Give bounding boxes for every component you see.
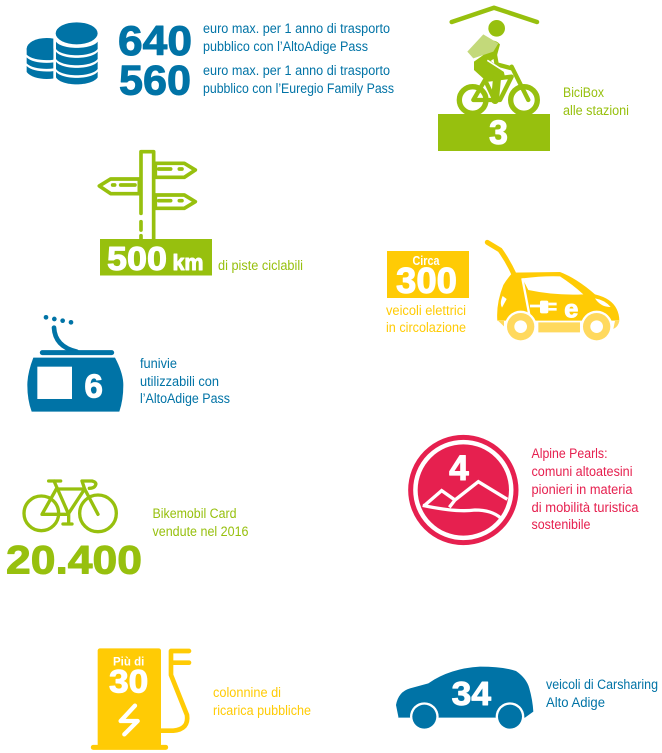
text: charging stations label: colonnine di: [213, 685, 281, 700]
text: cycle paths label: di piste ciclabili: [218, 258, 303, 273]
text: charging stations label: ricarica pubbliche: [213, 703, 311, 718]
icon: charging pump: [93, 648, 189, 747]
text: Alpine Pearls description: comuni altoatesini: [532, 464, 632, 479]
number: 4: 4: [449, 449, 469, 488]
number: 34: 34: [452, 676, 491, 713]
text: carsharing label: Alto Adige: [546, 695, 605, 710]
text: Alpine Pearls description: sostenibile: [532, 517, 590, 532]
text: Bikemobil Card label: Bikemobil Card: [152, 506, 236, 521]
panel: Bikemobil Card: [6, 481, 248, 582]
stat box: 3: [438, 114, 550, 152]
icon: electric car: e: [564, 295, 578, 323]
stat box: 500 km: [100, 239, 212, 277]
icon: car: [396, 667, 537, 732]
panel: carsharing: [396, 667, 658, 732]
text: Alpine Pearls description: di mobilità turistica: [532, 500, 639, 515]
icon: signpost: [99, 152, 195, 240]
icon: cyclist: [459, 20, 537, 113]
text: 560 description: pubblico con l’Euregio Family Pass: [203, 81, 394, 96]
text: Alpine Pearls description: pionieri in materia: [532, 482, 633, 497]
number: 6: 6: [84, 369, 103, 406]
stat box: circa 300: Circa: [412, 253, 440, 268]
icon: charging pump: 30: [109, 662, 148, 699]
text: electric vehicles label: veicoli elettrici: [386, 303, 466, 318]
text: cable cars label: utilizzabili con: [140, 374, 219, 389]
text: BiciBox label: BiciBox: [563, 85, 604, 100]
text: Alpine Pearls description: Alpine Pearls:: [532, 446, 608, 461]
panel: BiciBox: [438, 8, 629, 152]
panel: public transport pass costs: [26, 22, 394, 96]
icon: bicycle: [24, 481, 116, 532]
text: cable cars label: l’AltoAdige Pass: [140, 391, 230, 406]
text: 560 description: euro max. per 1 anno di trasporto: [203, 63, 390, 78]
icon: electric car: [487, 242, 619, 343]
panel: cable cars: [27, 315, 230, 412]
panel: cycle paths: [99, 152, 303, 277]
stat box: circa 300: 300: [396, 260, 457, 301]
icon: coins: [27, 22, 98, 84]
icon: roof: [452, 8, 537, 22]
number: 20.400: 20.400: [6, 538, 142, 582]
text: cable cars label: funivie: [140, 356, 177, 371]
icon: cable car: [27, 315, 123, 412]
icon: mountain badge: [411, 437, 516, 543]
text: Bikemobil Card label: vendute nel 2016: [152, 524, 248, 539]
text: BiciBox label: alle stazioni: [563, 103, 629, 118]
number: 640: 640: [118, 17, 192, 64]
stat box: 500 km: km: [172, 250, 204, 275]
stat box: 3: 3: [489, 114, 508, 152]
panel: electric vehicles: [386, 242, 619, 343]
number: 560: 560: [119, 56, 191, 104]
panel: Alpine Pearls: [411, 437, 639, 543]
stat box: 500 km: 500: [107, 240, 167, 277]
panel: charging stations: [93, 648, 311, 747]
text: 640 description: euro max. per 1 anno di trasporto: [203, 21, 390, 36]
text: electric vehicles label: in circolazione: [386, 320, 466, 335]
text: 640 description: pubblico con l’AltoAdige Pass: [203, 39, 368, 54]
stat box: circa 300: [387, 251, 469, 301]
icon: charging pump: Più di: [113, 654, 144, 668]
